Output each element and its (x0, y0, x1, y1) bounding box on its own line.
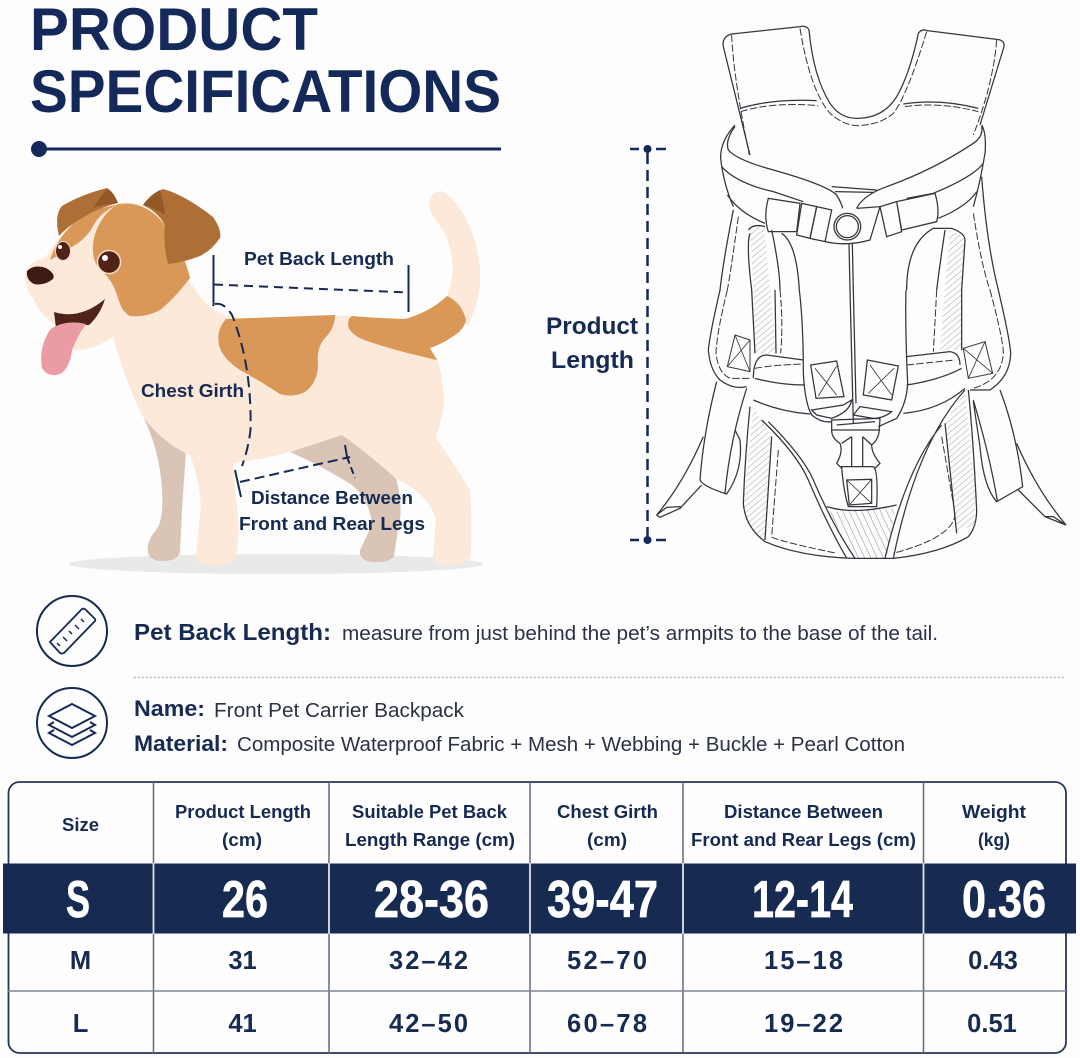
table row: size M: M (70, 947, 91, 975)
table row: size L: 19–22 (764, 1010, 843, 1038)
table row: size M (70, 947, 1018, 975)
product name and material: Material: (134, 731, 228, 756)
back length dashes (214, 255, 408, 312)
table row: size L: 42–50 (389, 1010, 468, 1038)
table header row: Suitable Pet Back (352, 801, 508, 822)
dog head (25, 203, 190, 350)
label: pet back length: Pet Back Length (244, 248, 394, 269)
highlighted row: size S: 28-36 (374, 871, 489, 929)
table row: size L: L (73, 1010, 88, 1038)
highlighted row: size S: 39-47 (547, 871, 658, 929)
table row: size L: 60–78 (567, 1010, 647, 1038)
dog ears (57, 188, 220, 264)
leg distance dashes (235, 445, 355, 497)
label: distance between legs: Front and Rear Legs (239, 513, 425, 534)
pet back length description: measure from just behind the pet’s armpits to the base of the tail. (342, 623, 938, 645)
label: chest girth: Chest Girth (141, 380, 244, 401)
dog tail (429, 191, 480, 325)
illustration: dog with measurements (25, 188, 483, 574)
table header row: Length Range (cm) (345, 829, 515, 850)
icon: ruler (37, 596, 107, 666)
label: distance between legs: Distance Between (251, 487, 413, 508)
table header row: Product Length (175, 801, 311, 822)
table header row: Distance Between (724, 801, 883, 822)
table header row: (kg) (978, 829, 1010, 850)
product name and material: Front Pet Carrier Backpack (214, 700, 465, 722)
highlighted row: size S: 12-14 (752, 871, 853, 929)
table header row: Size (62, 815, 99, 835)
table header row: Weight (962, 801, 1026, 822)
table row: size M: 52–70 (567, 947, 647, 975)
label: product length: Length (551, 347, 634, 374)
table row: size M: 15–18 (764, 947, 843, 975)
highlighted row: size S: 0.36 (962, 871, 1046, 929)
size table (3, 782, 1076, 1053)
product name and material (134, 696, 905, 756)
dog head patches (93, 203, 190, 316)
table row: size M: 32–42 (389, 947, 468, 975)
table row: size M: 0.43 (968, 947, 1018, 975)
dog tail patch (348, 296, 466, 360)
highlighted row: size S (3, 863, 1076, 934)
table header row: Chest Girth (557, 801, 658, 822)
table row: size L: 41 (228, 1010, 257, 1038)
product name and material: Name: (134, 696, 205, 721)
dog mouth (54, 299, 105, 328)
table header row (62, 801, 1026, 850)
title (30, 0, 501, 125)
product length dimension line (630, 145, 666, 544)
table row: size L: 0.51 (967, 1010, 1017, 1038)
table row: size M: 31 (228, 947, 257, 975)
dog shadow (69, 554, 483, 574)
table row: size L (73, 1010, 1017, 1038)
icon: layers (37, 688, 107, 758)
illustration: backpack line drawing (657, 26, 1066, 558)
highlighted row: size S: S (66, 871, 90, 929)
label: product length (546, 313, 638, 374)
table header row: (cm) (587, 829, 627, 850)
product name and material: Composite Waterproof Fabric + Mesh + Webbing + Buckle + Pearl Cotton (237, 734, 905, 756)
title underline with dot (31, 141, 501, 157)
dog eyes and nose (27, 242, 121, 284)
dog far legs (141, 412, 401, 562)
chest girth dashes (215, 304, 251, 466)
dog body (100, 278, 472, 566)
title: SPECIFICATIONS (30, 58, 501, 125)
label: distance between legs (239, 487, 425, 534)
highlighted row: size S: 26 (222, 871, 268, 929)
dog back patch (218, 315, 335, 396)
table header row: Front and Rear Legs (cm) (691, 829, 916, 850)
pet back length description: Pet Back Length: (134, 619, 331, 645)
table header row: (cm) (222, 829, 262, 850)
label: product length: Product (546, 313, 638, 340)
pet back length description (134, 619, 938, 645)
dog tongue (41, 322, 86, 375)
